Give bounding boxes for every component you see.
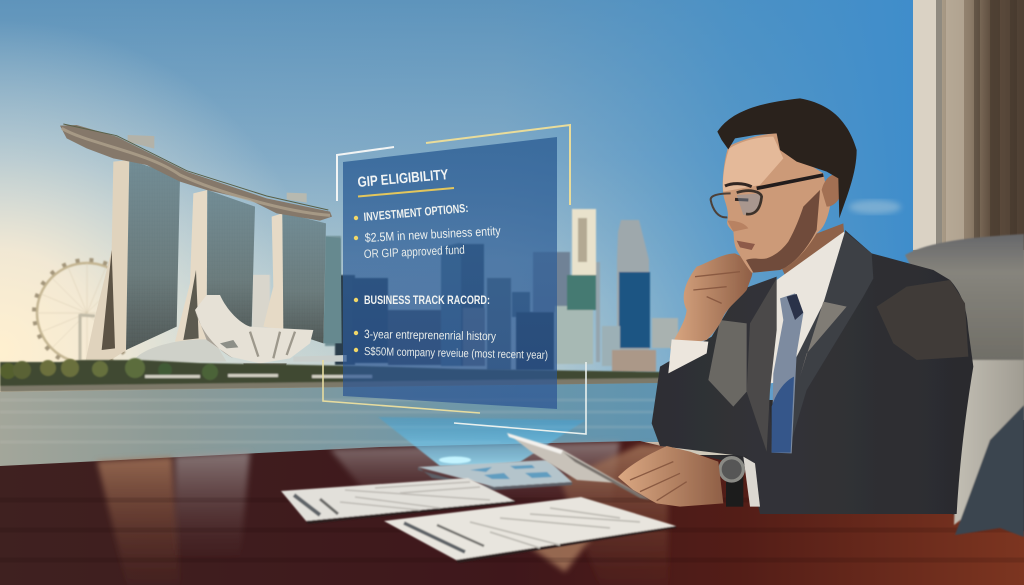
window sill behind man [615,442,740,455]
shirt cuff left [668,339,708,373]
bullet: investment options [354,201,469,224]
eyebrow and eye [725,184,752,200]
ear [822,174,844,207]
table top [0,441,1024,585]
tower three [263,213,326,343]
skypark deck [60,125,332,221]
bullet: amount and fund [354,224,502,261]
raised hand on chin [670,253,752,348]
bullet: business track record: BUSINESS TRACK RACORD: [364,293,490,307]
tower far right [323,237,342,343]
landmark: Singapore Flyer wheel [34,260,140,366]
glasses [711,175,823,217]
white corner bracket bottom right [454,362,586,434]
heading underline [358,188,454,196]
hand on table [618,446,723,507]
tie [772,293,803,453]
jacket body [652,230,973,514]
document left [281,478,515,524]
jacket lapel [783,232,873,452]
tower one [85,160,180,363]
chair [905,234,1024,537]
gold corner bracket top right [426,125,570,205]
background: sky [0,0,914,400]
GIP eligibility hologram panel [323,125,586,434]
tablet on table with chart [418,456,572,490]
document right [384,497,676,563]
face [723,133,830,273]
jacket sunlit panel [708,320,747,407]
tablet held by man [507,433,650,500]
hologram projection beam [378,417,586,466]
bullet: amount and fund: $2.5M in new business entity [364,224,502,245]
bullet: company revenue: S$50M company reveiue (most recent year) [364,346,548,362]
bullet: investment options: INVESTMENT OPTIONS: [363,201,469,224]
tower two [175,190,255,342]
rooftop blocks [128,135,307,203]
wristwatch [718,456,745,507]
hair [717,98,857,218]
window frame and curtain [913,0,1024,420]
water [0,383,660,467]
landmark: ArtScience Museum [133,295,347,377]
bullet: amount and fund: OR GIP approved fund [364,243,465,261]
bullet: entrepreneurial history: 3-year entreprenenrial history [364,327,496,343]
white corner bracket top left [337,147,394,201]
far shoreline and trees [0,358,660,392]
gold corner bracket bottom left [323,360,480,413]
panel background [343,137,557,409]
shirt cuff right [743,457,760,507]
businessman [618,98,973,514]
mouth [737,241,755,250]
landmark: Marina Bay Sands [60,124,342,363]
panel heading: GIP ELIGIBILITY [357,167,449,191]
shirt collar and front [770,232,848,383]
distant skyline [252,209,678,372]
neck [773,223,848,293]
